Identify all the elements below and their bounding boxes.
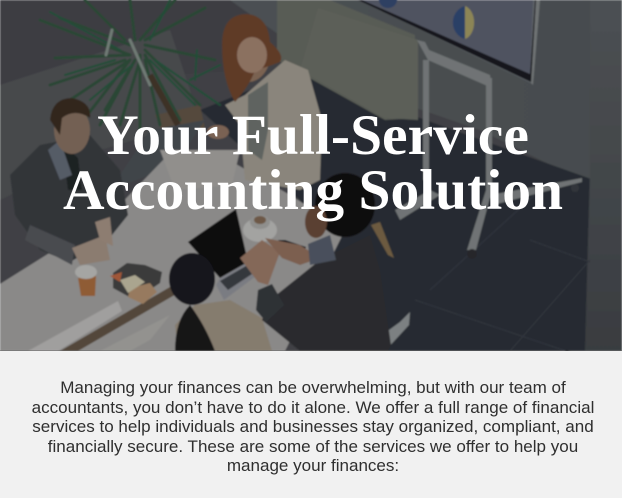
intro paragraph: services to help individuals and businesses stay organized, compliant, and [32,417,594,436]
smartphone [278,240,306,252]
intro paragraph: Managing your finances can be overwhelming, but with our team of [60,378,566,397]
coffee cup and saucer [243,215,277,242]
plant [40,0,220,190]
man in suit [10,98,128,265]
display screen on stand [358,0,582,259]
seated woman [169,253,272,351]
title: Your Full-Service [97,104,529,167]
table [0,150,345,351]
room background [0,0,622,351]
pie chart on screen [379,0,474,39]
title [63,104,563,222]
paper coffee cup [75,265,97,296]
photo: office meeting seen from above [0,0,622,351]
standing woman [207,14,322,190]
intro paragraph: manage your finances: [227,456,399,475]
intro paragraph: financially secure. These are some of the services we offer to help you [48,437,578,456]
laptop [188,209,264,300]
desk organizer [110,263,162,304]
intro paragraph [32,378,594,475]
seated person in dark suit [240,173,391,351]
dark photo overlay edge [0,350,622,351]
office chair right [360,222,410,351]
floor tile lines [415,190,622,370]
intro paragraph: accountants, you don’t have to do it alone. We offer a full range of financial [32,398,594,417]
hero photo panel [0,0,622,351]
display stand [395,40,582,259]
title: Accounting Solution [63,159,563,222]
